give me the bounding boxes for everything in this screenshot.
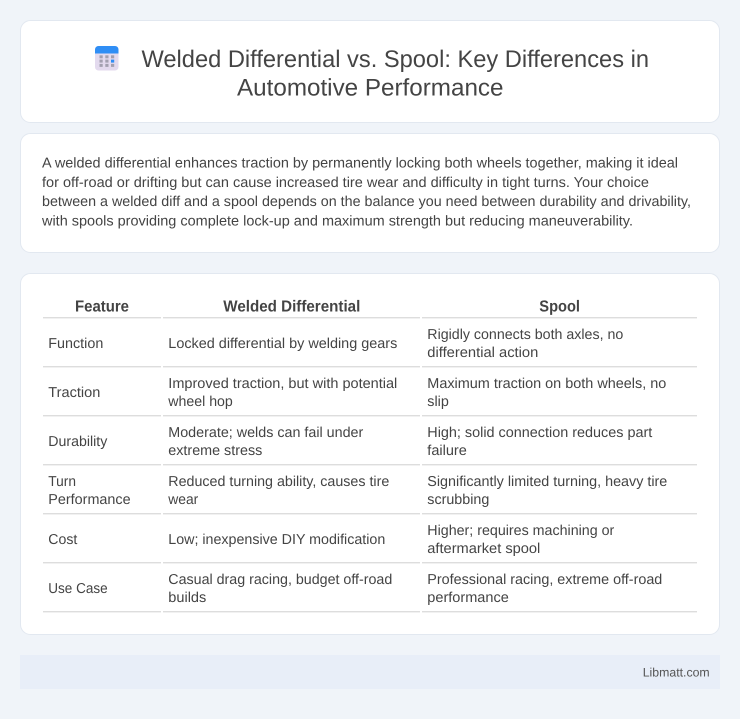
intro text xyxy=(41,156,691,230)
row: Durability: Durability xyxy=(48,434,108,450)
footer text: Libmatt.com: Libmatt.com xyxy=(643,665,710,679)
row: Traction: Maximum traction on both wheels, no xyxy=(427,376,666,392)
row: Use Case: builds xyxy=(168,590,206,606)
intro text: between a welded diff and a spool depends on the balance you need between durability and drivability, xyxy=(42,194,691,210)
row: Turn Performance: Turn xyxy=(48,474,76,490)
row: Function xyxy=(48,327,623,361)
row: Traction: slip xyxy=(427,394,449,410)
row: Cost xyxy=(48,523,615,557)
title: Automotive Performance xyxy=(237,74,504,102)
intro text: with spools providing complete lock-up and maximum strength but reducing maneuverability. xyxy=(41,214,633,230)
table header row: Spool xyxy=(539,299,580,316)
row: Turn Performance xyxy=(48,474,667,508)
row: Use Case xyxy=(48,572,662,606)
row: Traction: Improved traction, but with potential xyxy=(168,376,397,392)
intro text: A welded differential enhances traction by permanently locking both wheels together, making it ideal xyxy=(42,156,678,172)
table header row: Welded Differential xyxy=(223,299,360,316)
row: Durability xyxy=(48,425,652,459)
row: Cost: Low; inexpensive DIY modification xyxy=(168,532,385,548)
row: Turn Performance: Significantly limited turning, heavy tire xyxy=(427,474,667,490)
panel: comparison table xyxy=(20,274,720,634)
panel: title card xyxy=(20,20,720,122)
row: Function: Locked differential by welding gears xyxy=(168,336,397,352)
row: Turn Performance: Performance xyxy=(48,492,131,508)
row: Use Case: Professional racing, extreme off-road xyxy=(427,572,662,588)
row: Turn Performance: scrubbing xyxy=(427,492,489,508)
row: Cost: Higher; requires machining or xyxy=(427,523,615,539)
row: Durability: Moderate; welds can fail under xyxy=(168,425,364,441)
icon: calendar grid xyxy=(95,46,118,70)
row: Durability: failure xyxy=(427,443,467,459)
row: Turn Performance: wear xyxy=(167,492,198,508)
row: Durability: extreme stress xyxy=(168,443,262,459)
table header row xyxy=(75,299,580,316)
row: Function: differential action xyxy=(427,345,538,361)
row: Traction xyxy=(48,376,666,410)
row: Cost: Cost xyxy=(48,532,77,548)
row: Traction: wheel hop xyxy=(167,394,233,410)
panel: intro card xyxy=(20,134,720,252)
table header row: Feature xyxy=(75,299,129,316)
row: Use Case: performance xyxy=(427,590,509,606)
row: Cost: aftermarket spool xyxy=(427,541,540,557)
row: Turn Performance: Reduced turning ability, causes tire xyxy=(168,474,389,490)
title xyxy=(142,46,649,102)
title: Welded Differential vs. Spool: Key Differences in xyxy=(142,46,649,73)
row: Durability: High; solid connection reduces part xyxy=(427,425,652,441)
footer bar xyxy=(20,655,720,689)
row: Use Case: Casual drag racing, budget off-road xyxy=(168,572,392,588)
row: Traction: Traction xyxy=(48,385,100,401)
intro text: for off-road or drifting but can cause increased tire wear and difficulty in tight turns. Your choice xyxy=(42,175,649,191)
row: Use Case: Use Case xyxy=(48,581,108,597)
row: Function: Function xyxy=(48,336,103,352)
row: Function: Rigidly connects both axles, no xyxy=(427,327,623,343)
